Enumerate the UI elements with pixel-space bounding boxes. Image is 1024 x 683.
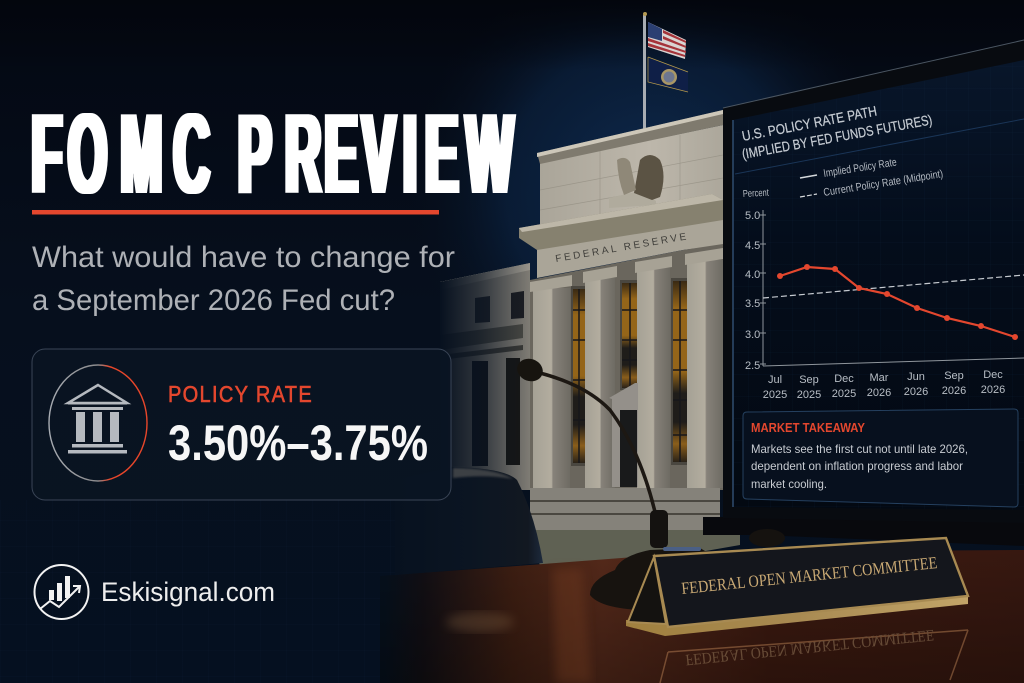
title underline [32, 210, 439, 214]
subtitle [32, 241, 455, 317]
y axis [743, 188, 769, 372]
chart title: U.S. POLICY RATE PATH [741, 103, 878, 144]
columns [530, 248, 723, 488]
subtitle: What would have to change for [32, 241, 455, 274]
chart legend: Implied Policy Rate [823, 157, 898, 180]
upper cornice [537, 110, 723, 164]
x axis: Sep [944, 370, 964, 382]
microphone [514, 355, 785, 610]
plate face [654, 538, 968, 627]
lit windows [571, 278, 689, 466]
x axis: Sep [799, 374, 819, 386]
market takeaway box [743, 409, 1018, 507]
plate reflection: FEDERAL OPEN MARKET COMMITTEE [685, 626, 935, 668]
market takeaway box: dependent on inflation progress and labor [751, 459, 963, 473]
y axis: 5.0 [745, 210, 760, 222]
y axis: Percent [743, 188, 769, 200]
label: policy rate: POLICY RATE [168, 381, 313, 407]
panel: policy rate [32, 349, 451, 500]
icon: american flag [648, 22, 686, 59]
y axis: 3.0 [745, 329, 760, 341]
x axis: 2026 [942, 385, 966, 397]
x axis: 2025 [797, 389, 821, 401]
implied policy rate line [777, 264, 1018, 340]
plate base [626, 592, 968, 636]
x axis: 2025 [763, 389, 787, 401]
flagpole and flags [643, 12, 688, 129]
logo [34, 565, 275, 619]
left wing [440, 263, 530, 490]
monitor screen [733, 60, 1024, 510]
x axis: Jul [768, 374, 782, 386]
subtitle: a September 2026 Fed cut? [32, 284, 395, 317]
steps [530, 488, 720, 530]
title: FOMC PREVIEW [32, 89, 514, 218]
plate reflection [660, 626, 968, 683]
name plate [626, 538, 968, 683]
x axis: Dec [834, 373, 854, 385]
floor [530, 530, 740, 566]
monitor frame [723, 40, 1024, 523]
y axis: 4.0 [745, 269, 760, 281]
y axis: 3.5 [745, 298, 760, 310]
eagle statue [609, 155, 664, 208]
monitor [703, 40, 1024, 546]
y axis: 2.5 [745, 360, 760, 372]
value: policy rate range: 3.50%–3.75% [168, 415, 428, 471]
x axis: 2025 [832, 388, 856, 400]
federal reserve building [440, 110, 740, 566]
entablature inscription: FEDERAL RESERVE [555, 231, 690, 265]
market takeaway box: MARKET TAKEAWAY [751, 420, 865, 435]
entablature [537, 215, 723, 278]
market takeaway box: Markets see the first cut not until late 2026, [751, 442, 968, 456]
chart legend [800, 157, 944, 199]
leather chair [395, 467, 543, 575]
plate side [628, 557, 666, 624]
chart title: (IMPLIED BY FED FUNDS FUTURES) [741, 111, 933, 162]
x axis: 2026 [904, 386, 928, 398]
current policy rate dashed line [763, 275, 1024, 298]
icon: bank building in ring [49, 365, 147, 481]
icon: chart logo [34, 565, 88, 619]
chart legend: Current Policy Rate (Midpoint) [823, 168, 944, 199]
market takeaway box: market cooling. [751, 477, 827, 491]
x axis: Dec [983, 369, 1003, 381]
upper block [540, 125, 723, 228]
x axis: 2026 [981, 384, 1005, 396]
facade [530, 244, 723, 490]
x axis: Mar [870, 372, 889, 384]
brand name: Eskisignal.com [101, 577, 275, 607]
plate lettering: FEDERAL OPEN MARKET COMMITTEE [680, 553, 938, 598]
x axis [763, 358, 1024, 401]
x axis: 2026 [867, 387, 891, 399]
wooden table [380, 550, 1024, 683]
x axis: Jun [907, 371, 925, 383]
monitor stand [703, 517, 1024, 546]
entrance door [609, 383, 638, 487]
y axis: 4.5 [745, 240, 760, 252]
icon: federal reserve flag [648, 57, 688, 92]
